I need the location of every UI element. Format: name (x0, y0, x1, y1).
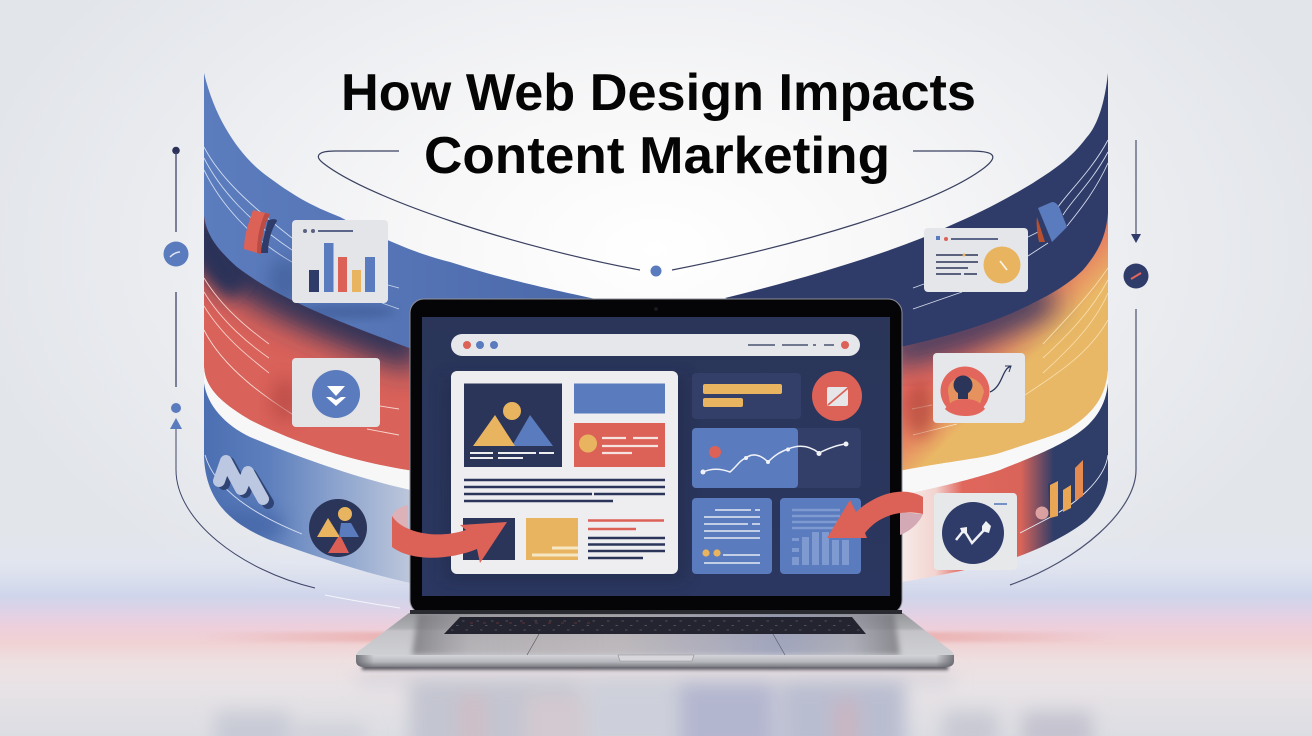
icon: small bars (1036, 460, 1083, 520)
title: How Web Design Impacts (341, 64, 976, 122)
laptop base (356, 613, 954, 656)
panel: left ribbon bands (204, 73, 600, 585)
right timeline (1010, 140, 1148, 585)
laptop shadow (362, 665, 948, 670)
card: person with trend arrow (933, 353, 1025, 423)
article card (445, 371, 685, 581)
browser address bar (451, 334, 860, 356)
chart card (780, 498, 861, 574)
coral callout (574, 423, 665, 467)
reflection (215, 674, 1092, 736)
card: trend badge (934, 493, 1017, 570)
arrow: left curved into article (392, 505, 507, 563)
keyboard (444, 617, 866, 634)
icon: left 3D tab (244, 210, 277, 254)
card: download icon (292, 358, 380, 427)
title underline swoosh with dot (318, 151, 993, 276)
yellow thumbnail (526, 518, 578, 560)
card: bar chart (292, 220, 388, 303)
card: article with gauge (924, 228, 1028, 292)
icon: right 3D tab (1037, 202, 1067, 242)
title (341, 64, 976, 185)
icon: people shapes (309, 499, 367, 557)
laptop lid (410, 299, 902, 614)
panel: right ribbon bands (725, 73, 1108, 585)
headline panel (692, 373, 801, 419)
line chart panel (692, 428, 861, 488)
screen (422, 317, 890, 596)
coral badge (812, 371, 862, 421)
title: Content Marketing (424, 127, 890, 185)
hero image (464, 384, 562, 467)
text card (692, 498, 772, 574)
arrow: right curved into chart (827, 492, 923, 538)
icon: squiggle M (219, 461, 268, 503)
left timeline (164, 147, 400, 608)
laptop (215, 299, 1092, 736)
